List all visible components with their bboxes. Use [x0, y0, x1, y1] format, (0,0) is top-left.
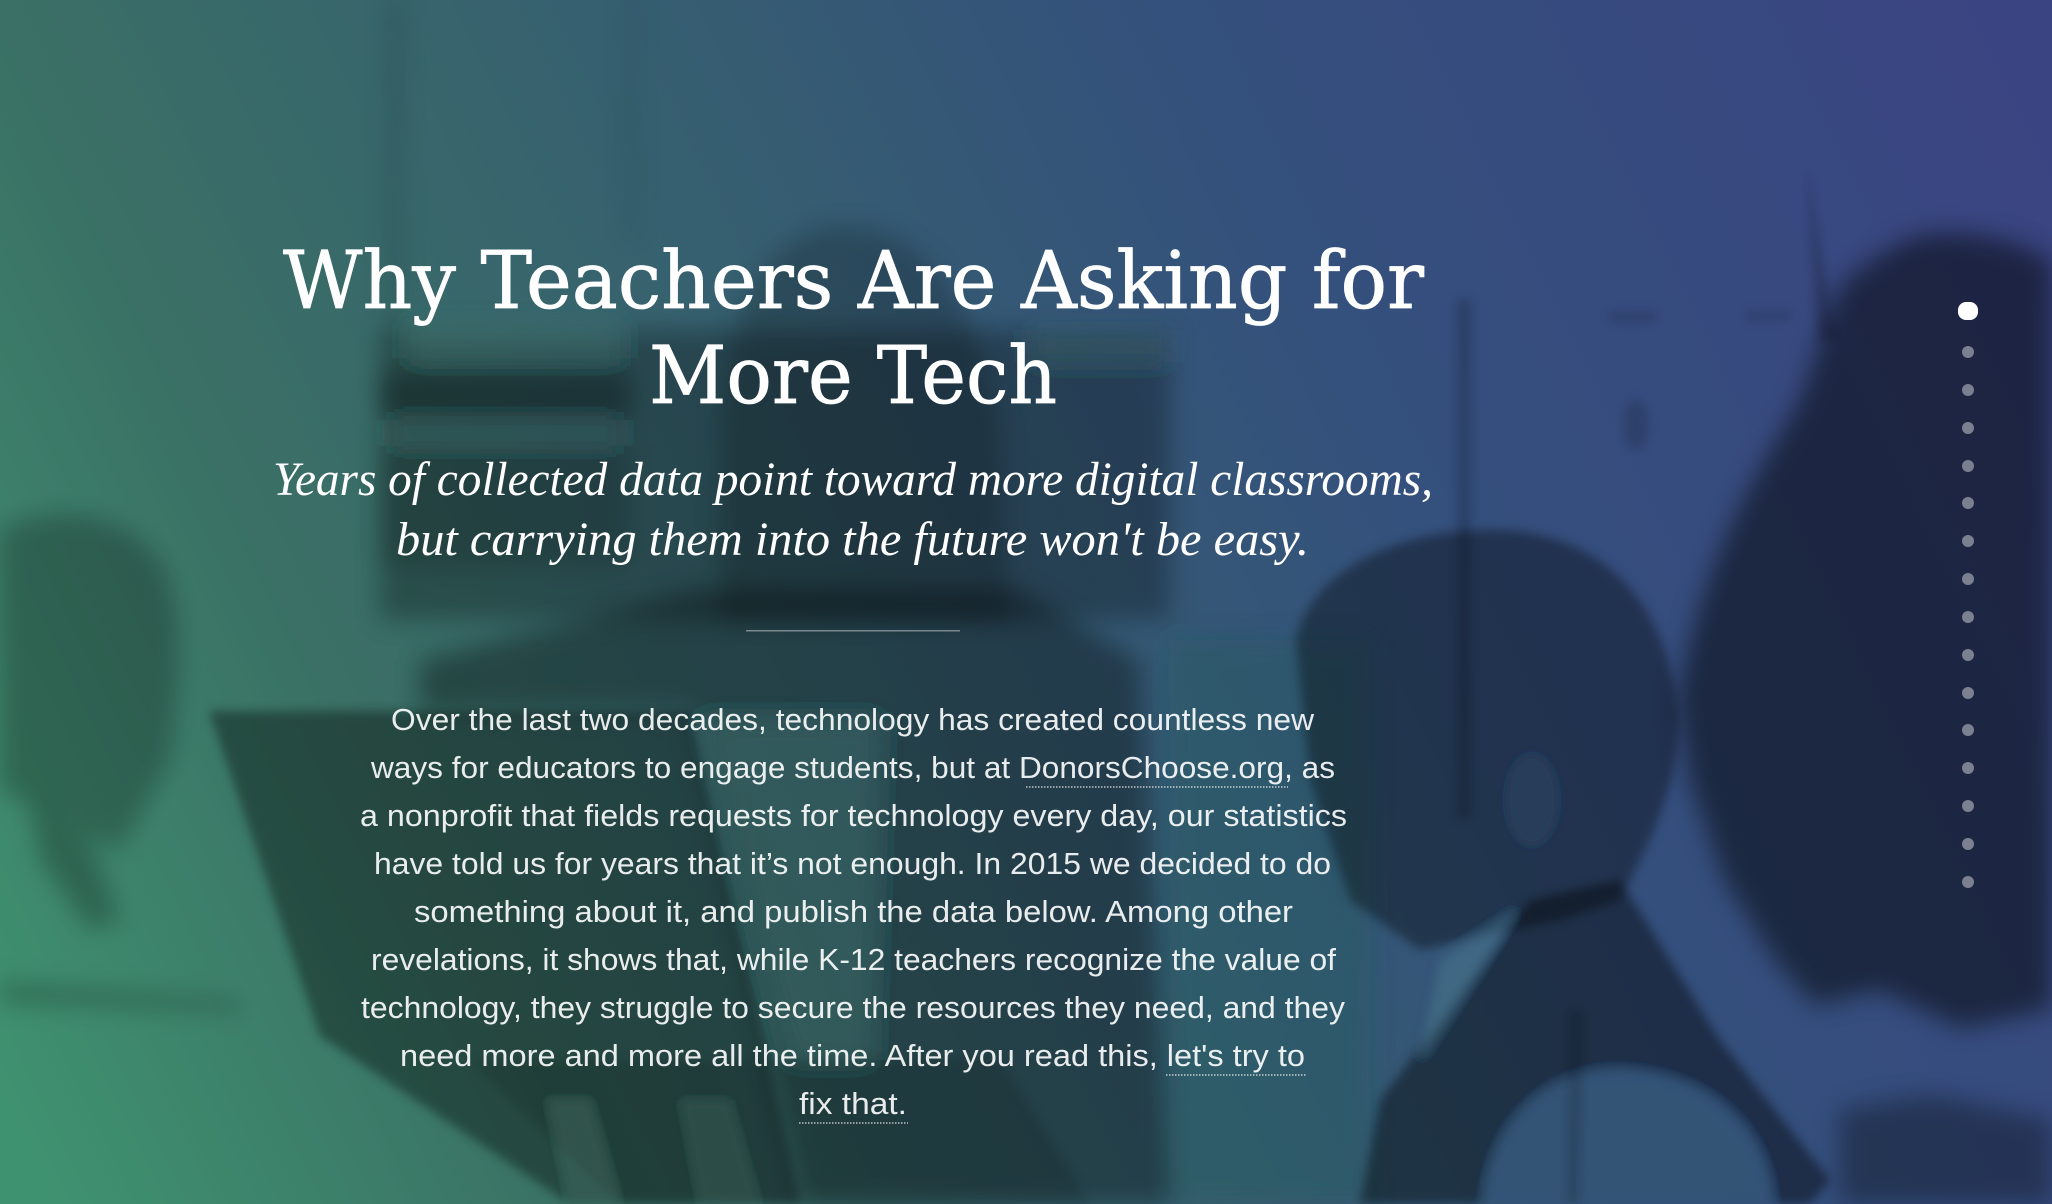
laptop [209, 711, 1090, 1204]
post and wall marks [1458, 300, 1790, 820]
link underlines [799, 787, 1306, 1123]
title: Why Teachers Are Asking for [283, 234, 1425, 327]
subtitle [273, 453, 1433, 566]
teacher silhouette [420, 226, 1170, 1204]
intro paragraph [360, 702, 1347, 1121]
intro paragraph: a nonprofit that fields requests for technology every day, our statistics [360, 798, 1347, 833]
blurred classroom wall and shelves [380, 0, 1370, 1204]
intro paragraph: ways for educators to engage students, but at DonorsChoose.org, as [370, 750, 1335, 785]
intro paragraph: fix that. [799, 1086, 907, 1121]
hair spike [1806, 165, 1838, 340]
section navigation dots [1958, 302, 1978, 888]
title: More Tech [649, 329, 1057, 422]
intro paragraph: something about it, and publish the data below. Among other [414, 894, 1293, 929]
intro paragraph: need more and more all the time. After you read this, let's try to [400, 1038, 1305, 1073]
intro paragraph: Over the last two decades, technology has created countless new [391, 702, 1315, 737]
left student [0, 515, 240, 1012]
divider [746, 630, 960, 632]
inactive dots [1962, 346, 1974, 888]
intro paragraph: technology, they struggle to secure the resources they need, and they [361, 990, 1346, 1025]
student at far right [1678, 233, 2052, 1204]
intro paragraph: have told us for years that it’s not enough. In 2015 we decided to do [374, 846, 1331, 881]
intro paragraph: revelations, it shows that, while K-12 teachers recognize the value of [371, 942, 1336, 977]
title [283, 234, 1425, 422]
boy in profile [1296, 530, 1830, 1204]
subtitle: Years of collected data point toward more digital classrooms, [273, 453, 1433, 506]
active dot [1958, 302, 1978, 320]
subtitle: but carrying them into the future won't be easy. [396, 513, 1309, 566]
